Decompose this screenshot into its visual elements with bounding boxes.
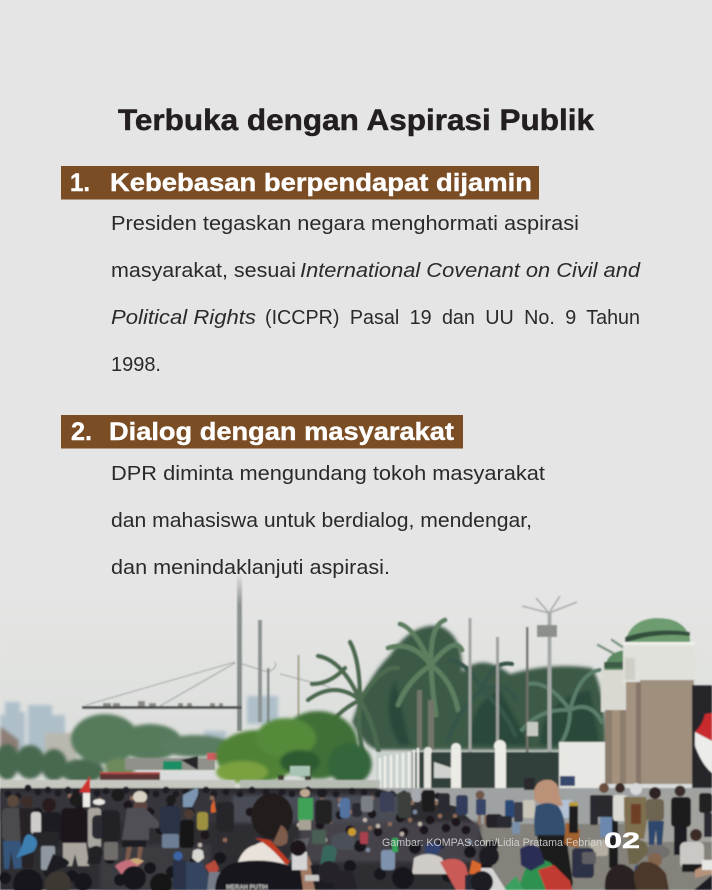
- section 2 body text: dan mahasiswa untuk berdialog, mendengar,: [111, 510, 532, 532]
- crowd mid-tone patches: [0, 792, 480, 890]
- tall light poles: [468, 596, 577, 787]
- central flowering tree: [216, 711, 372, 785]
- section 1 body text: masyarakat, sesuai: [111, 260, 296, 282]
- green vest marshal and standing row: [298, 788, 468, 830]
- standing figure: black hoodie and grey pants: [61, 794, 89, 866]
- palm trunks: [417, 690, 434, 750]
- palm fronds: [308, 620, 630, 760]
- section 2 heading bar: 2.: [71, 418, 92, 446]
- black fence with red-white flag: [692, 685, 712, 793]
- standing figure: grey sweater and jeans: [2, 795, 23, 869]
- section 1 body text: (ICCPR) Pasal 19 dan UU No. 9 Tahun: [265, 307, 640, 329]
- main dome: [625, 618, 690, 643]
- section 1 body text: [111, 213, 641, 376]
- section 2 heading bar: Dialog dengan masyarakat: [109, 418, 455, 446]
- standing figure: white cap and backpack: [88, 788, 124, 860]
- crowd flag: red and white: [79, 776, 90, 807]
- small dome: [604, 650, 625, 670]
- standing figure: grey jacket with white helmet: [122, 791, 159, 861]
- woman in hijab and denim jacket: [534, 780, 580, 890]
- section 1 heading bar: [61, 166, 539, 200]
- tree trunks: [240, 770, 311, 789]
- section 1 heading bar: 1.: [70, 169, 90, 197]
- people on plinth: [476, 776, 575, 834]
- section 2 heading bar: [61, 415, 463, 448]
- section 1 heading bar: Kebebasan berpendapat dijamin: [110, 169, 532, 197]
- background trees left: [0, 714, 231, 783]
- section 1 body text: Presiden tegaskan negara menghormati aspirasi: [111, 213, 579, 235]
- standing figure: black shirt: [19, 796, 35, 868]
- seated crowd middle: [290, 828, 489, 890]
- gate towers: [601, 618, 696, 784]
- standing figures: navy and black centre: [160, 787, 234, 848]
- section 2 body text: dan menindaklanjuti aspirasi.: [111, 557, 390, 579]
- crowd base mass: [0, 788, 500, 890]
- white wall: [559, 742, 607, 792]
- green jacket woman with navy hijab and red backpack: [469, 845, 572, 890]
- standing figure: white shirt with black jacket and bag: [31, 798, 61, 870]
- section 1 body text: 1998.: [111, 354, 161, 376]
- section 2 body text: [111, 463, 545, 579]
- section 1 body text: Political Rights: [111, 307, 256, 329]
- overpass and signs: [125, 758, 215, 770]
- plinth wall and pavement: [376, 788, 712, 890]
- black flag: [181, 756, 198, 770]
- distant skyline buildings: [0, 696, 278, 763]
- crowd heads: many rows: [5, 788, 492, 880]
- section 1 body text: International Covenant on Civil and: [300, 260, 641, 282]
- foreground man with white hood and black shirt: [215, 793, 320, 890]
- title: Terbuka dengan Aspirasi Publik: [118, 104, 594, 137]
- road sign: [163, 761, 182, 770]
- section 2 body text: DPR diminta mengundang tokoh masyarakat: [111, 463, 545, 485]
- palm trees: foliage mass: [352, 626, 606, 750]
- photo credit: Gambar: KOMPAS.com/Lidia Pratama Febrian: [382, 837, 602, 849]
- black bollards: [569, 802, 618, 868]
- bottom right seated figures: [572, 829, 712, 890]
- photo sky: [0, 570, 712, 810]
- seated figures left foreground: [13, 834, 221, 890]
- standing group by the gate: [590, 783, 712, 855]
- roadside white barrier and bus: [0, 766, 380, 790]
- page number: 02: [604, 828, 640, 853]
- iron fence with white posts: [376, 740, 560, 794]
- photo: protest crowd outside parliament gate: [0, 570, 712, 890]
- main pole and street furniture: [82, 573, 330, 731]
